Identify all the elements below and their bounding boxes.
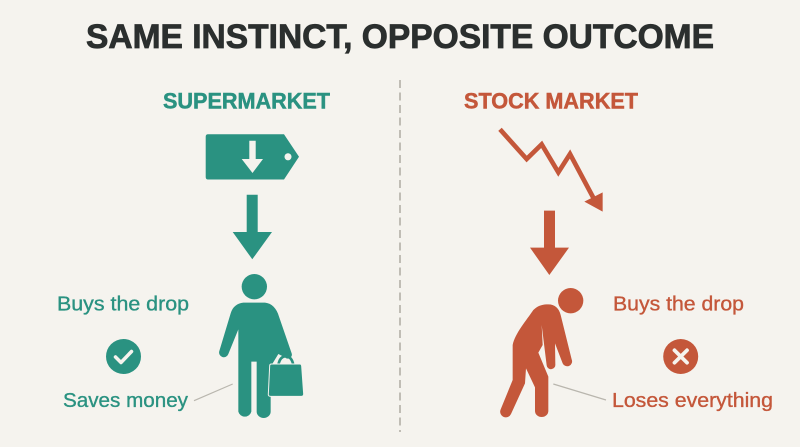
icon: slumped investor [500,288,583,417]
arrow: down to investor [530,211,569,275]
heading: stock market: STOCK MARKET [464,88,639,114]
label: loses everything: Loses everything [612,390,773,412]
icon: x mark [663,339,698,374]
title: SAME INSTINCT, OPPOSITE OUTCOME [86,18,714,56]
leader line: saves money [194,384,233,401]
arrow: down to shopper [233,195,272,259]
leader line: loses everything [553,384,606,400]
label: saves money: Saves money [63,390,188,412]
label: buys the drop: Buys the drop [613,294,744,316]
icon: check mark [106,339,141,374]
icon: price tag with down arrow [206,134,299,180]
icon: shopper with bag [219,274,304,418]
panel: stock market [464,88,773,417]
panel: supermarket [57,88,331,418]
heading: supermarket: SUPERMARKET [163,88,331,114]
label: buys the drop: Buys the drop [57,294,189,316]
icon: falling chart arrow [500,129,603,212]
